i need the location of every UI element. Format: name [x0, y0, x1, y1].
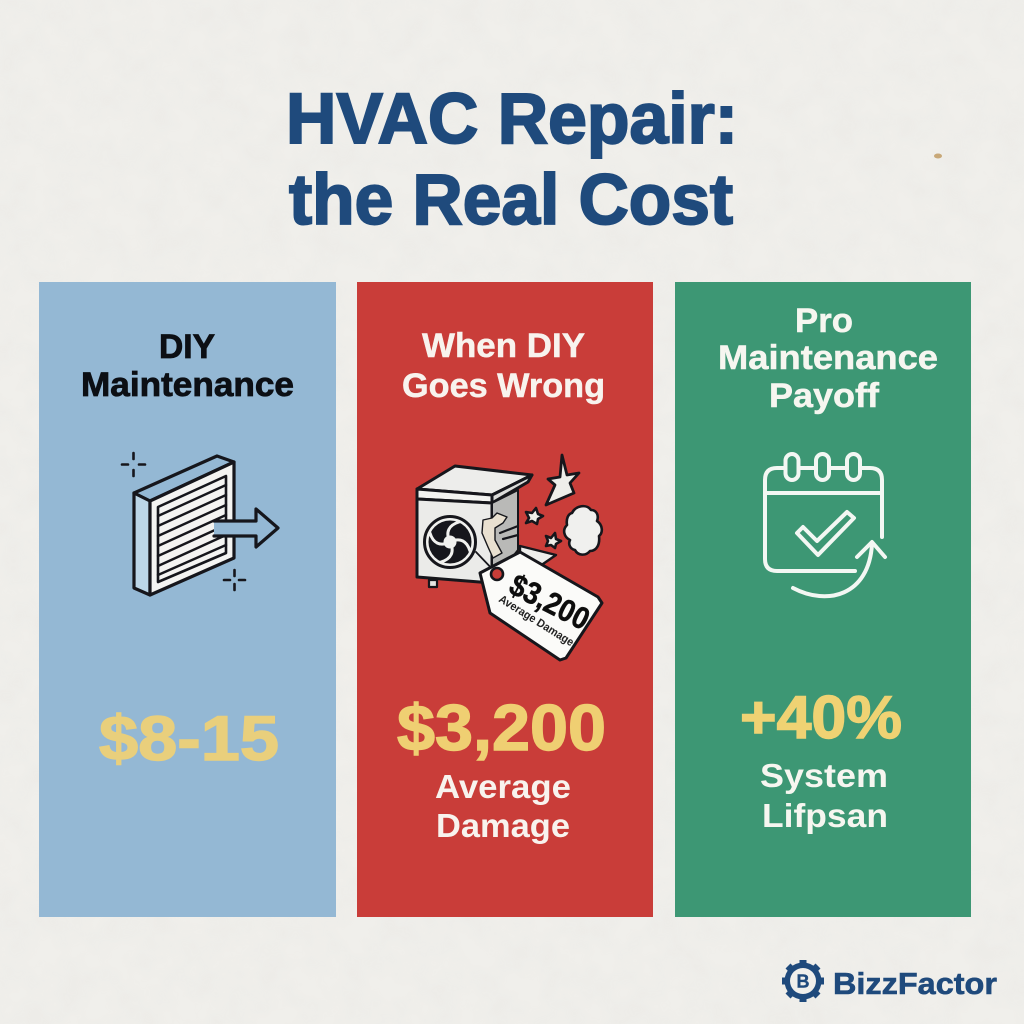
fan [424, 516, 476, 568]
icon: broken AC unit with price tag [417, 455, 602, 660]
logo: BizzFactor: BizzFactor [833, 966, 997, 1001]
heading: DIY Maintenance [81, 328, 294, 404]
icon: air filter with arrow [122, 453, 278, 595]
heading: DIY Maintenance: DIY [159, 328, 215, 366]
heading: Pro Maintenance Payoff: Pro [795, 302, 853, 340]
icon: gear [782, 960, 824, 1002]
value: $3,200 Average Damage: Damage [436, 807, 570, 844]
heading: Pro Maintenance Payoff [718, 302, 938, 415]
heading: When DIY Goes Wrong: Goes Wrong [402, 367, 605, 405]
panel: When DIY Goes Wrong [357, 282, 653, 917]
value: +40% System Lifpsan: System [760, 757, 888, 794]
panel: DIY Maintenance [39, 282, 336, 917]
title: HVAC Repair: [286, 80, 738, 159]
value: $3,200 Average Damage [397, 691, 606, 844]
value: $8-15: $8-15 [99, 704, 279, 774]
logo: BizzFactor [782, 960, 997, 1002]
value: +40% System Lifpsan: +40% [740, 684, 902, 751]
price tag: Average Damage [496, 593, 576, 649]
AC unit body [417, 466, 556, 587]
heading: DIY Maintenance: Maintenance [81, 366, 294, 404]
icon: gear: B [796, 972, 810, 992]
value: +40% System Lifpsan [740, 684, 902, 834]
title [286, 80, 738, 240]
spark and smoke [526, 455, 602, 555]
heading: Pro Maintenance Payoff: Maintenance [718, 339, 938, 377]
panel: Pro Maintenance Payoff [675, 282, 971, 917]
value: +40% System Lifpsan: Lifpsan [762, 797, 888, 834]
heading: When DIY Goes Wrong [402, 327, 605, 405]
price tag [476, 552, 602, 660]
value: $3,200 Average Damage: Average [435, 768, 571, 805]
title: the Real Cost [289, 161, 733, 240]
heading: Pro Maintenance Payoff: Payoff [769, 377, 880, 415]
price tag: $3,200 [504, 567, 595, 637]
heading: When DIY Goes Wrong: When DIY [422, 327, 585, 365]
value: $3,200 Average Damage: $3,200 [397, 691, 606, 764]
icon: calendar with check [765, 454, 885, 596]
